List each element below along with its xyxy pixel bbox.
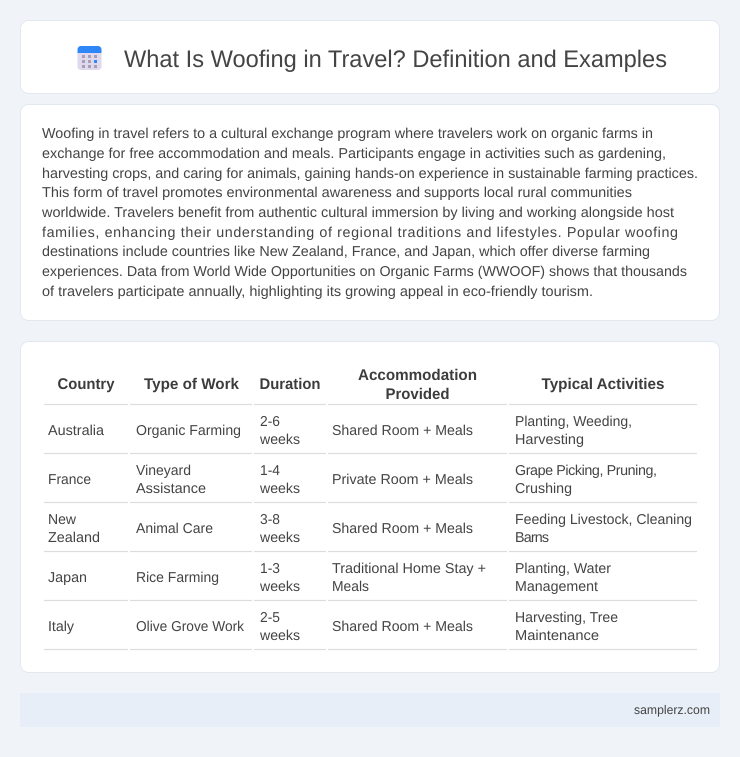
table row: New Zealand: Animal Care bbox=[136, 521, 213, 537]
table row: Japan bbox=[48, 561, 611, 595]
table row: Australia: Shared Room + Meals bbox=[332, 423, 473, 439]
table row: Italy: Maintenance bbox=[515, 628, 599, 644]
table row: Japan: 1-3 bbox=[260, 561, 280, 577]
table row: France: Private Room + Meals bbox=[332, 472, 473, 488]
text block: description paragraph: worldwide. Travelers benefit from authentic cultural immersion by living and working alongside host bbox=[41, 205, 674, 221]
table row: Australia: Planting, Weeding, bbox=[515, 414, 632, 430]
panel: title card bbox=[20, 20, 720, 94]
table row: France: Vineyard bbox=[136, 463, 191, 479]
table header: Country bbox=[58, 376, 115, 393]
table row: France: Assistance bbox=[136, 481, 206, 497]
table row: New Zealand: Feeding Livestock, Cleaning bbox=[515, 512, 692, 528]
table row: France: 1-4 bbox=[260, 463, 280, 479]
table row: Japan: Rice Farming bbox=[136, 570, 219, 586]
table row: France: weeks bbox=[259, 481, 300, 497]
table row: Italy: 2-5 bbox=[260, 610, 280, 626]
panel: table card bbox=[20, 342, 720, 672]
table row: Japan: weeks bbox=[259, 579, 300, 595]
text block: description paragraph: harvesting crops, and caring for animals, gaining hands-on experience in sustainable farming practices. bbox=[42, 166, 698, 182]
text block: description paragraph: Woofing in travel refers to a cultural exchange program where travelers work on organic farms in bbox=[42, 126, 653, 142]
table row: New Zealand: weeks bbox=[259, 530, 300, 546]
table row: France bbox=[48, 463, 657, 497]
table row: Italy bbox=[48, 610, 618, 644]
table row: Australia: Harvesting bbox=[515, 432, 584, 448]
table row: Australia bbox=[48, 414, 632, 448]
table row: France: Grape Picking, Pruning, bbox=[515, 463, 657, 479]
table row: Italy: weeks bbox=[259, 628, 300, 644]
text block: description paragraph: destinations include countries like New Zealand, France, and Japan, which offer diverse farming bbox=[42, 244, 650, 260]
text block: description paragraph: This form of travel promotes environmental awareness and supports local rural communities bbox=[42, 185, 632, 201]
table header: Provided bbox=[386, 386, 450, 403]
footer source text: samplerz.com bbox=[634, 703, 710, 717]
table row: Italy: Shared Room + Meals bbox=[332, 619, 473, 635]
table row: New Zealand: Shared Room + Meals bbox=[332, 521, 473, 537]
table row: New Zealand: Barns bbox=[515, 530, 549, 546]
table rules bbox=[44, 404, 697, 650]
table row: Australia: weeks bbox=[259, 432, 300, 448]
text block: description paragraph: of travelers participate annually, highlighting its growing appeal in eco-friendly tourism. bbox=[42, 284, 593, 300]
table row: New Zealand: Zealand bbox=[48, 530, 100, 546]
title: What Is Woofing in Travel? Definition and Examples bbox=[124, 46, 667, 73]
table row: Italy: Olive Grove Work bbox=[136, 619, 245, 635]
table row: Japan: Japan bbox=[48, 570, 87, 586]
icon: calendar bbox=[78, 46, 102, 70]
table row: Australia: Organic Farming bbox=[136, 423, 241, 439]
table header: Duration bbox=[260, 376, 320, 393]
table row: Japan: Management bbox=[515, 579, 598, 595]
panel: description bbox=[20, 104, 720, 320]
text block: description paragraph: experiences. Data from World Wide Opportunities on Organic Farms (WWOOF) shows that thousands bbox=[42, 264, 687, 280]
table row: France: France bbox=[48, 472, 91, 488]
table header bbox=[58, 367, 664, 403]
text block: description paragraph: families, enhancing their understanding of regional traditions and lifestyles. Popular woofing bbox=[42, 225, 678, 241]
text block: description paragraph: exchange for free accommodation and meals. Participants engage in activities such as gardening, bbox=[42, 146, 666, 162]
table row: New Zealand: 3-8 bbox=[260, 512, 280, 528]
table row: Australia: Australia bbox=[48, 423, 104, 439]
table row: Australia: 2-6 bbox=[260, 414, 280, 430]
footer bar bbox=[20, 693, 720, 727]
table header: Accommodation bbox=[358, 367, 477, 384]
table row: Italy: Harvesting, Tree bbox=[515, 610, 618, 626]
table row: Japan: Traditional Home Stay + bbox=[332, 561, 486, 577]
table row: Italy: Italy bbox=[48, 619, 75, 635]
table row: Japan: Planting, Water bbox=[515, 561, 611, 577]
text block: description paragraph bbox=[41, 126, 698, 300]
table row: New Zealand bbox=[48, 512, 692, 546]
table header: Typical Activities bbox=[542, 376, 664, 393]
table row: Japan: Meals bbox=[332, 579, 369, 595]
table row: New Zealand: New bbox=[48, 512, 77, 528]
table row: France: Crushing bbox=[515, 481, 572, 497]
table header: Type of Work bbox=[144, 376, 239, 393]
